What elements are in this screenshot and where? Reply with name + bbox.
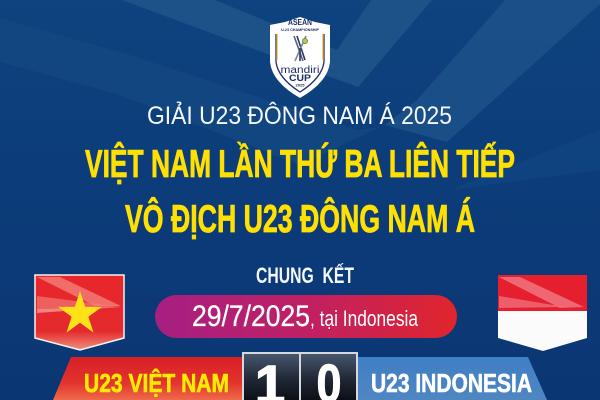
logo wording: 2025 [296, 82, 305, 88]
logo wording [280, 18, 320, 88]
logo wording: ASEAN [288, 18, 312, 27]
logo wording: CUP [289, 73, 311, 83]
flag: Vietnam [35, 275, 124, 350]
date pill: , tại Indonesia [310, 306, 419, 331]
team bar: Indonesia: U23 INDONESIA [371, 368, 532, 398]
star [58, 291, 102, 333]
logo wording: U-23 CHAMPIONSHIP [281, 27, 319, 32]
date pill [155, 295, 457, 338]
stage label: CHUNG KẾT [256, 263, 354, 288]
trophy mark [294, 36, 308, 61]
scoreboard [242, 352, 358, 400]
date pill: 29/7/2025 [192, 300, 310, 333]
team bar: Vietnam [53, 357, 243, 400]
team bar: Indonesia [358, 357, 547, 400]
team bar: Vietnam: U23 VIỆT NAM [84, 368, 229, 398]
subtitle: GIẢI U23 ĐÔNG NAM Á 2025 [147, 100, 452, 130]
logo wording: mandiri [280, 65, 320, 76]
main title [85, 142, 515, 241]
logo: ASEAN U23 Mandiri Cup shield [270, 17, 330, 98]
flag: Indonesia [498, 275, 587, 351]
